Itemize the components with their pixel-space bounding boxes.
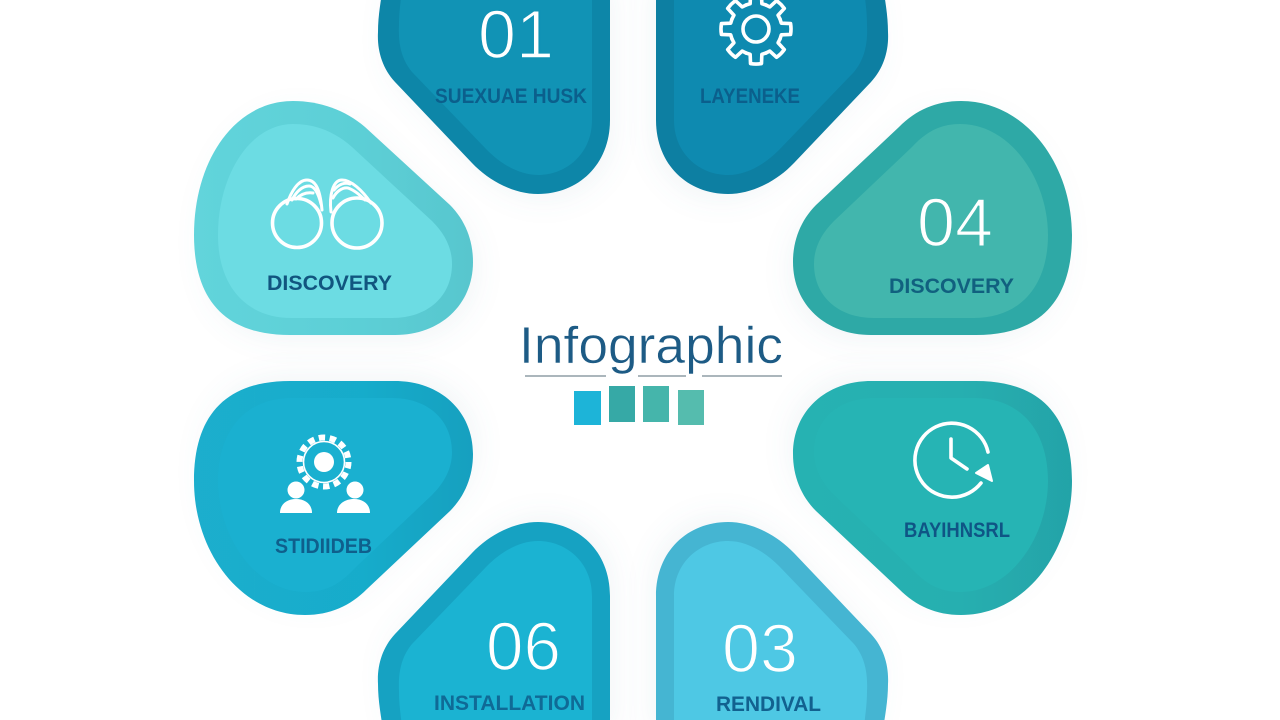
panel: lower left petal people and gear [194,381,473,615]
title block [519,317,783,425]
petal body [378,0,610,194]
petal inner [674,541,867,720]
label: RENDIVAL [716,693,821,716]
panel: bottom right petal 03 [656,522,888,720]
petal inner [814,124,1048,318]
panel: top right petal gear [656,0,888,194]
petal inner [218,124,452,318]
label: STIDIIDEB [275,535,372,558]
petal body [656,0,888,194]
label: DISCOVERY [889,275,1014,298]
petal body [194,101,473,335]
petal inner [399,0,592,175]
panel: upper right petal 04 [793,101,1072,335]
petal body [194,381,473,615]
number 04: 04 [917,184,993,261]
number 03: 03 [722,610,798,687]
petal inner [674,0,867,175]
petal body [656,522,888,720]
panel: upper left petal binoculars [194,101,473,335]
icon: gear [721,0,791,64]
label: BAYIHNSRL [904,519,1010,542]
label: LAYENEKE [700,85,800,108]
panel: top left petal 01 [378,0,610,194]
petal inner [814,398,1048,592]
title text: Infographic [519,317,783,375]
icon: binoculars [272,180,382,248]
petal inner [399,541,592,720]
petal body [793,101,1072,335]
panel: lower right petal clock [793,381,1072,615]
petal body [378,522,610,720]
color bars [574,386,704,425]
icon: team gear [280,438,370,513]
petal inner [218,398,452,592]
label: INSTALLATION [434,692,585,715]
icon: clock with arrow [915,423,992,497]
petal body [793,381,1072,615]
number 06: 06 [486,608,561,685]
label: DISCOVERY [267,272,392,295]
label: SUEXUAE HUSK [435,85,587,108]
panel: bottom left petal 06 [378,522,610,720]
